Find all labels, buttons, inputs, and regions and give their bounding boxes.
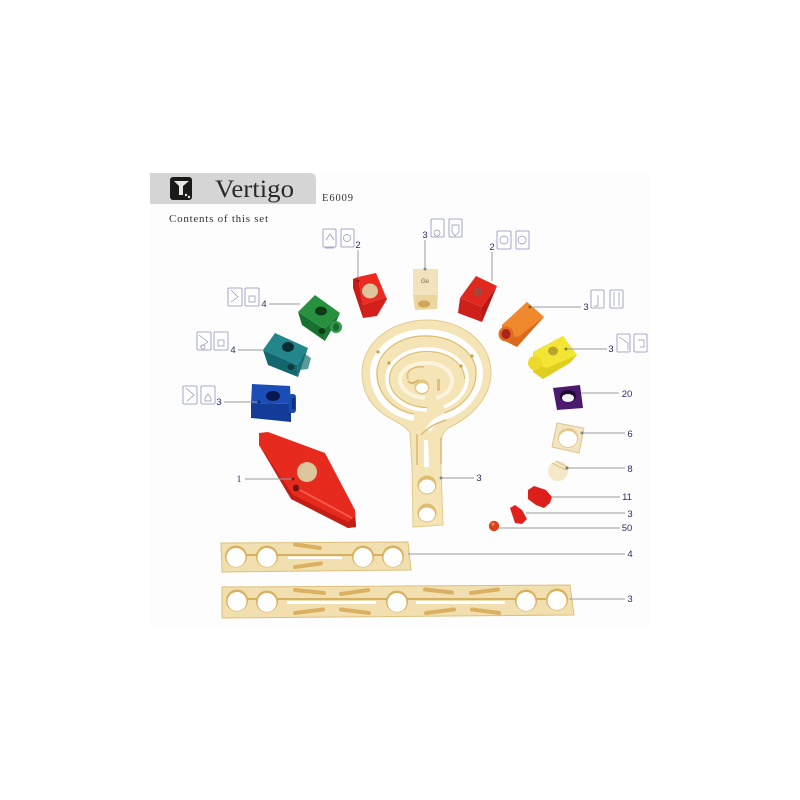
icon: parts 2 red xyxy=(497,231,529,249)
block: yellow (3): 3 xyxy=(608,344,614,355)
icon: parts 2 xyxy=(323,229,354,248)
block: teal (4): 4 xyxy=(230,345,236,356)
long strip (3): 3 xyxy=(627,594,633,605)
spiral track (3) xyxy=(362,320,491,527)
gap 2 xyxy=(387,349,467,410)
long strip (3) xyxy=(222,585,633,618)
block: orange (3) xyxy=(498,290,623,347)
header band xyxy=(150,173,316,204)
gap 1 xyxy=(373,332,480,430)
red piece (3): 3 xyxy=(627,509,633,520)
cream disc (8): 8 xyxy=(627,464,633,475)
icon: parts 4 green xyxy=(228,288,259,306)
track body xyxy=(362,320,491,527)
wedge: red (1): 1 xyxy=(237,475,242,485)
cream square (6): 6 xyxy=(627,429,633,440)
marble (50): 50 xyxy=(622,523,632,534)
short strip (4): 4 xyxy=(627,549,633,560)
block: blue (3): 3 xyxy=(216,397,222,408)
block: yellow (3) xyxy=(528,334,647,379)
block: cream (3): 3 xyxy=(422,230,428,241)
red cap (11) xyxy=(528,486,632,508)
block: cream (3) xyxy=(413,219,462,310)
panel: background xyxy=(150,172,650,627)
block: blue (3) xyxy=(183,384,296,422)
icon: parts 4 teal xyxy=(197,332,228,350)
purple square (20) xyxy=(553,385,632,410)
bridges xyxy=(376,350,474,368)
block: teal (4) xyxy=(197,332,311,377)
icon: parts 3 cream xyxy=(431,219,462,237)
block: red with hole (2): 2 xyxy=(489,242,495,253)
short strip (4) xyxy=(221,542,633,572)
stem xyxy=(424,440,429,467)
block: orange (3): 3 xyxy=(583,302,589,313)
subtitle: Contents of this set xyxy=(169,213,268,225)
red piece (3) xyxy=(510,505,633,524)
product code: E6009 xyxy=(322,193,353,204)
red cap (11): 11 xyxy=(622,492,632,503)
cream disc (8) xyxy=(548,461,633,481)
cream square (6) xyxy=(552,423,633,453)
block: cream (3): Ge xyxy=(421,279,430,285)
gap 3 xyxy=(400,363,452,398)
icon: parts 3 blue xyxy=(183,386,215,404)
icon: parts 3 orange xyxy=(591,290,623,308)
spiral track (3): 3 xyxy=(476,473,482,484)
block: red with disc (2) xyxy=(323,229,387,318)
purple square (20): 20 xyxy=(622,389,632,400)
block: red with hole (2) xyxy=(458,231,529,322)
icon: parts 3 yellow xyxy=(617,334,647,352)
block: green (4): 4 xyxy=(261,299,267,310)
inner spiral xyxy=(407,367,424,379)
block: red with disc (2): 2 xyxy=(355,240,361,251)
icon: vertigo logo xyxy=(170,177,192,200)
title: Vertigo xyxy=(215,176,294,203)
wedge: red (1) xyxy=(237,432,356,528)
marble (50) xyxy=(489,521,632,534)
block: green (4) xyxy=(228,288,342,341)
